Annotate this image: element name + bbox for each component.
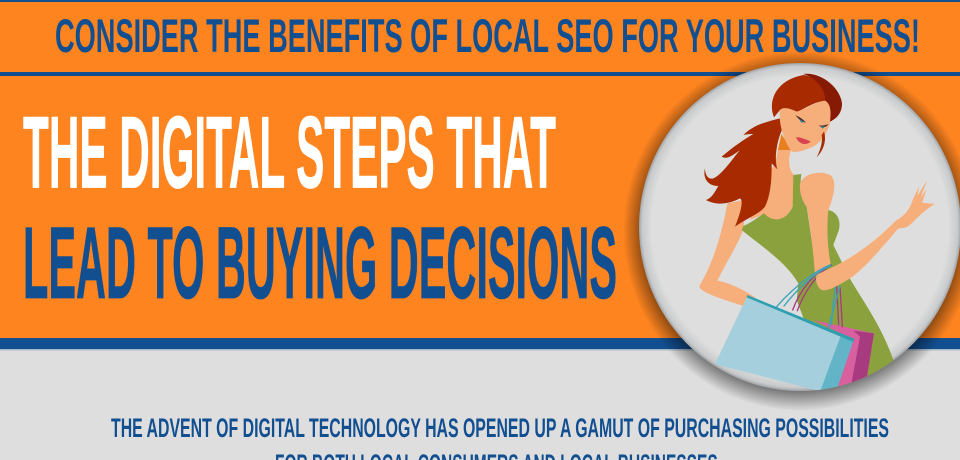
woman: shaded hair	[803, 74, 842, 122]
woman: lips	[796, 137, 811, 144]
woman: neck shadow	[778, 134, 790, 150]
woman: right shoulder and upper arm	[800, 173, 834, 275]
woman: loose hair strand	[817, 132, 825, 157]
pink shopping bag	[813, 320, 874, 388]
circle drop shadow	[623, 51, 960, 411]
woman: forearm and hand	[816, 180, 935, 290]
woman: eyes	[795, 115, 829, 129]
blue shopping bag	[715, 295, 854, 392]
circle badge	[639, 63, 960, 391]
orange banner	[0, 0, 960, 350]
woman: left arm	[699, 200, 755, 306]
woman: neck and chest	[750, 143, 794, 220]
woman: face	[780, 101, 831, 152]
bag handles	[776, 264, 843, 328]
woman: dress	[742, 174, 894, 382]
illustration: woman with shopping bags	[699, 74, 935, 392]
woman: ponytail hair	[704, 118, 783, 227]
woman: hair top	[772, 75, 826, 117]
